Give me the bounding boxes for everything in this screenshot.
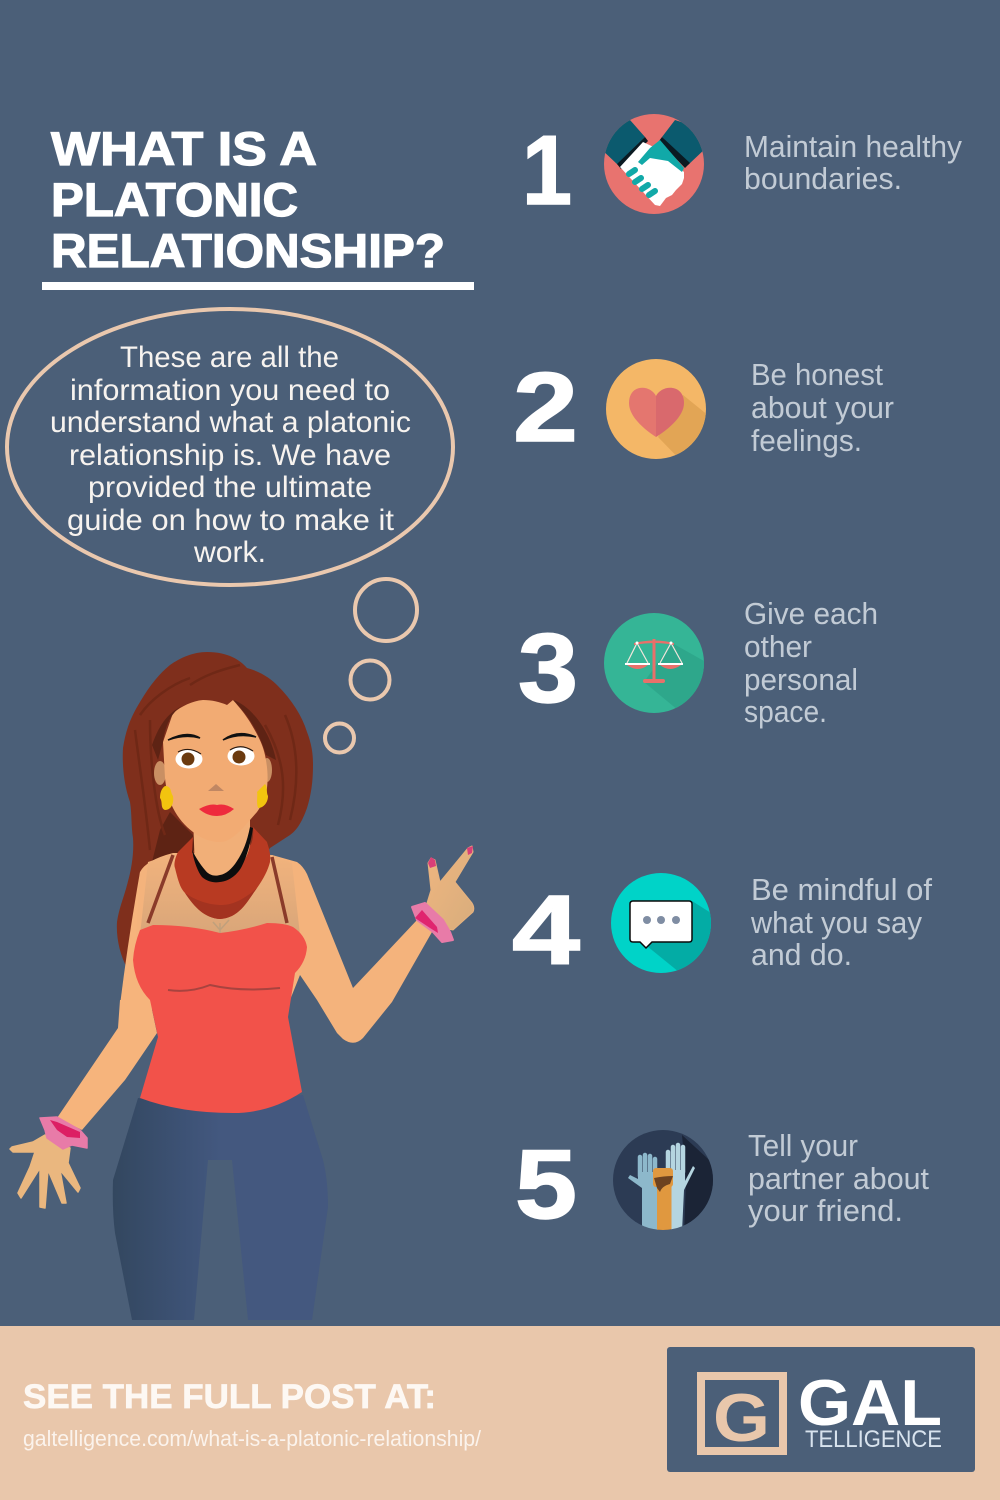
step text: partner about — [748, 1161, 929, 1196]
illustration: woman pointing — [10, 652, 474, 1320]
callout: thought bubble: provided the ultimate — [88, 471, 372, 504]
step text: Maintain healthy — [744, 129, 962, 164]
logo: G — [713, 1380, 770, 1456]
icon: heart — [606, 359, 706, 459]
step 1: 1 — [522, 115, 572, 225]
step text — [744, 129, 962, 196]
callout: thought bubble: information you need to — [70, 374, 390, 407]
step 2 — [516, 359, 894, 459]
footer heading: SEE THE FULL POST AT: — [23, 1378, 436, 1416]
step text: about your — [751, 390, 894, 425]
step text: personal — [744, 662, 858, 697]
step text: other — [744, 629, 812, 664]
step text: what you say — [750, 905, 922, 940]
logo — [667, 1347, 975, 1472]
step text: boundaries. — [744, 161, 902, 196]
title — [42, 122, 474, 290]
callout: thought bubble: work. — [193, 536, 266, 569]
step text: Give each — [744, 596, 878, 631]
step text: and do. — [751, 937, 852, 972]
icon: raised hands — [613, 1130, 713, 1230]
title: PLATONIC — [51, 173, 298, 226]
step text: feelings. — [751, 423, 862, 458]
step 5: 5 — [515, 1129, 577, 1239]
callout: thought bubble: guide on how to make it — [67, 504, 395, 537]
step text — [751, 357, 894, 458]
step text: Be honest — [751, 357, 883, 392]
footer url: galtelligence.com/what-is-a-platonic-relationship/ — [23, 1426, 482, 1451]
logo: GAL — [798, 1366, 942, 1439]
step text — [744, 596, 878, 729]
step text: your friend. — [748, 1193, 903, 1228]
icon: scales — [604, 613, 704, 713]
callout: thought bubble — [7, 309, 453, 752]
icon: chat bubble — [611, 873, 711, 973]
step text: Tell your — [748, 1128, 858, 1163]
step 3: 3 — [518, 613, 578, 723]
step text: space. — [744, 694, 827, 729]
title: RELATIONSHIP? — [51, 224, 445, 277]
step text: Be mindful of — [751, 872, 932, 907]
title: WHAT IS A — [51, 122, 317, 175]
callout: thought bubble: These are all the — [120, 341, 339, 374]
callout: thought bubble: relationship is. We have — [69, 439, 391, 472]
step 3 — [518, 596, 878, 729]
step text — [750, 872, 932, 972]
icon: handshake — [600, 114, 706, 214]
step 4 — [512, 873, 932, 973]
callout: thought bubble: understand what a platonic — [50, 406, 411, 439]
step 2: 2 — [513, 352, 578, 462]
step 4: 4 — [512, 875, 580, 985]
step text — [748, 1128, 929, 1228]
footer band — [0, 1326, 1000, 1500]
step 1 — [526, 114, 962, 214]
step 5 — [518, 1130, 929, 1230]
logo: TELLIGENCE — [805, 1426, 942, 1453]
